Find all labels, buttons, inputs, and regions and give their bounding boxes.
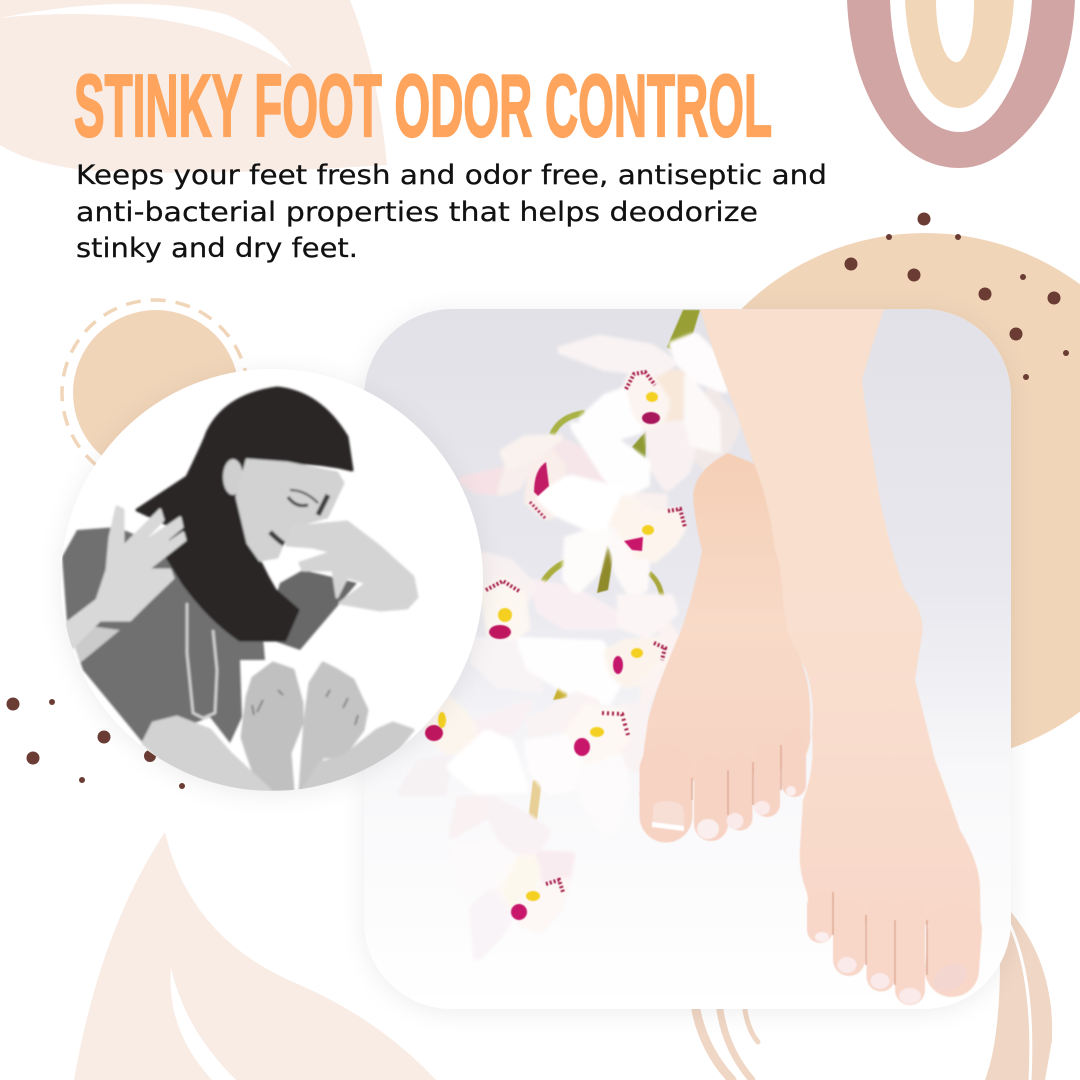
body text xyxy=(76,160,827,264)
raised hand xyxy=(67,507,185,653)
body text: anti-bacterial properties that helps deodorize xyxy=(76,197,758,228)
right foot toe gaps xyxy=(833,892,927,985)
orchid petals: small centre-right and lower-right flowers xyxy=(526,592,678,790)
scrubs right sleeve xyxy=(276,570,358,652)
panel: woman circle photo xyxy=(61,369,483,791)
decoration: right peach circle xyxy=(663,233,1080,763)
stethoscope xyxy=(187,603,217,718)
body text: Keeps your feet fresh and odor free, antiseptic and xyxy=(76,160,827,191)
decoration: bottom-right brush strokes xyxy=(696,905,1052,1080)
body text: stinky and dry feet. xyxy=(76,233,358,264)
left foot xyxy=(639,453,810,839)
panel: feet and orchids photo xyxy=(364,309,1011,1009)
decoration: top-right dots xyxy=(844,212,1069,380)
right foot xyxy=(700,309,981,1004)
face xyxy=(237,460,343,560)
hand on nose xyxy=(287,522,417,610)
patient soles xyxy=(242,663,367,790)
left foot toes xyxy=(666,740,794,824)
lower left arm xyxy=(74,626,120,664)
decoration: bottom-left leaf xyxy=(74,832,436,1080)
hair xyxy=(137,388,352,640)
right foot toes xyxy=(820,905,955,990)
right foot nails xyxy=(814,932,922,1004)
patient trousers xyxy=(143,717,270,790)
orchid lips: markings xyxy=(425,372,685,920)
decoration: lower-left dots xyxy=(6,698,185,789)
decoration: left peach circle with dashed ring xyxy=(47,285,263,501)
orchid stems xyxy=(528,310,700,820)
left foot toe gaps xyxy=(692,745,781,815)
decoration: top-right rainbow arch xyxy=(847,0,1075,168)
ear xyxy=(223,459,243,495)
orchid petals: far-left, lower-left and bottom flowers xyxy=(429,552,620,958)
eyes and mouth xyxy=(270,490,328,544)
orchid petals: top, left and centre flowers xyxy=(462,336,738,597)
scrubs xyxy=(62,527,265,743)
left foot nails xyxy=(652,786,796,839)
decoration: top-left leaf xyxy=(0,0,387,173)
